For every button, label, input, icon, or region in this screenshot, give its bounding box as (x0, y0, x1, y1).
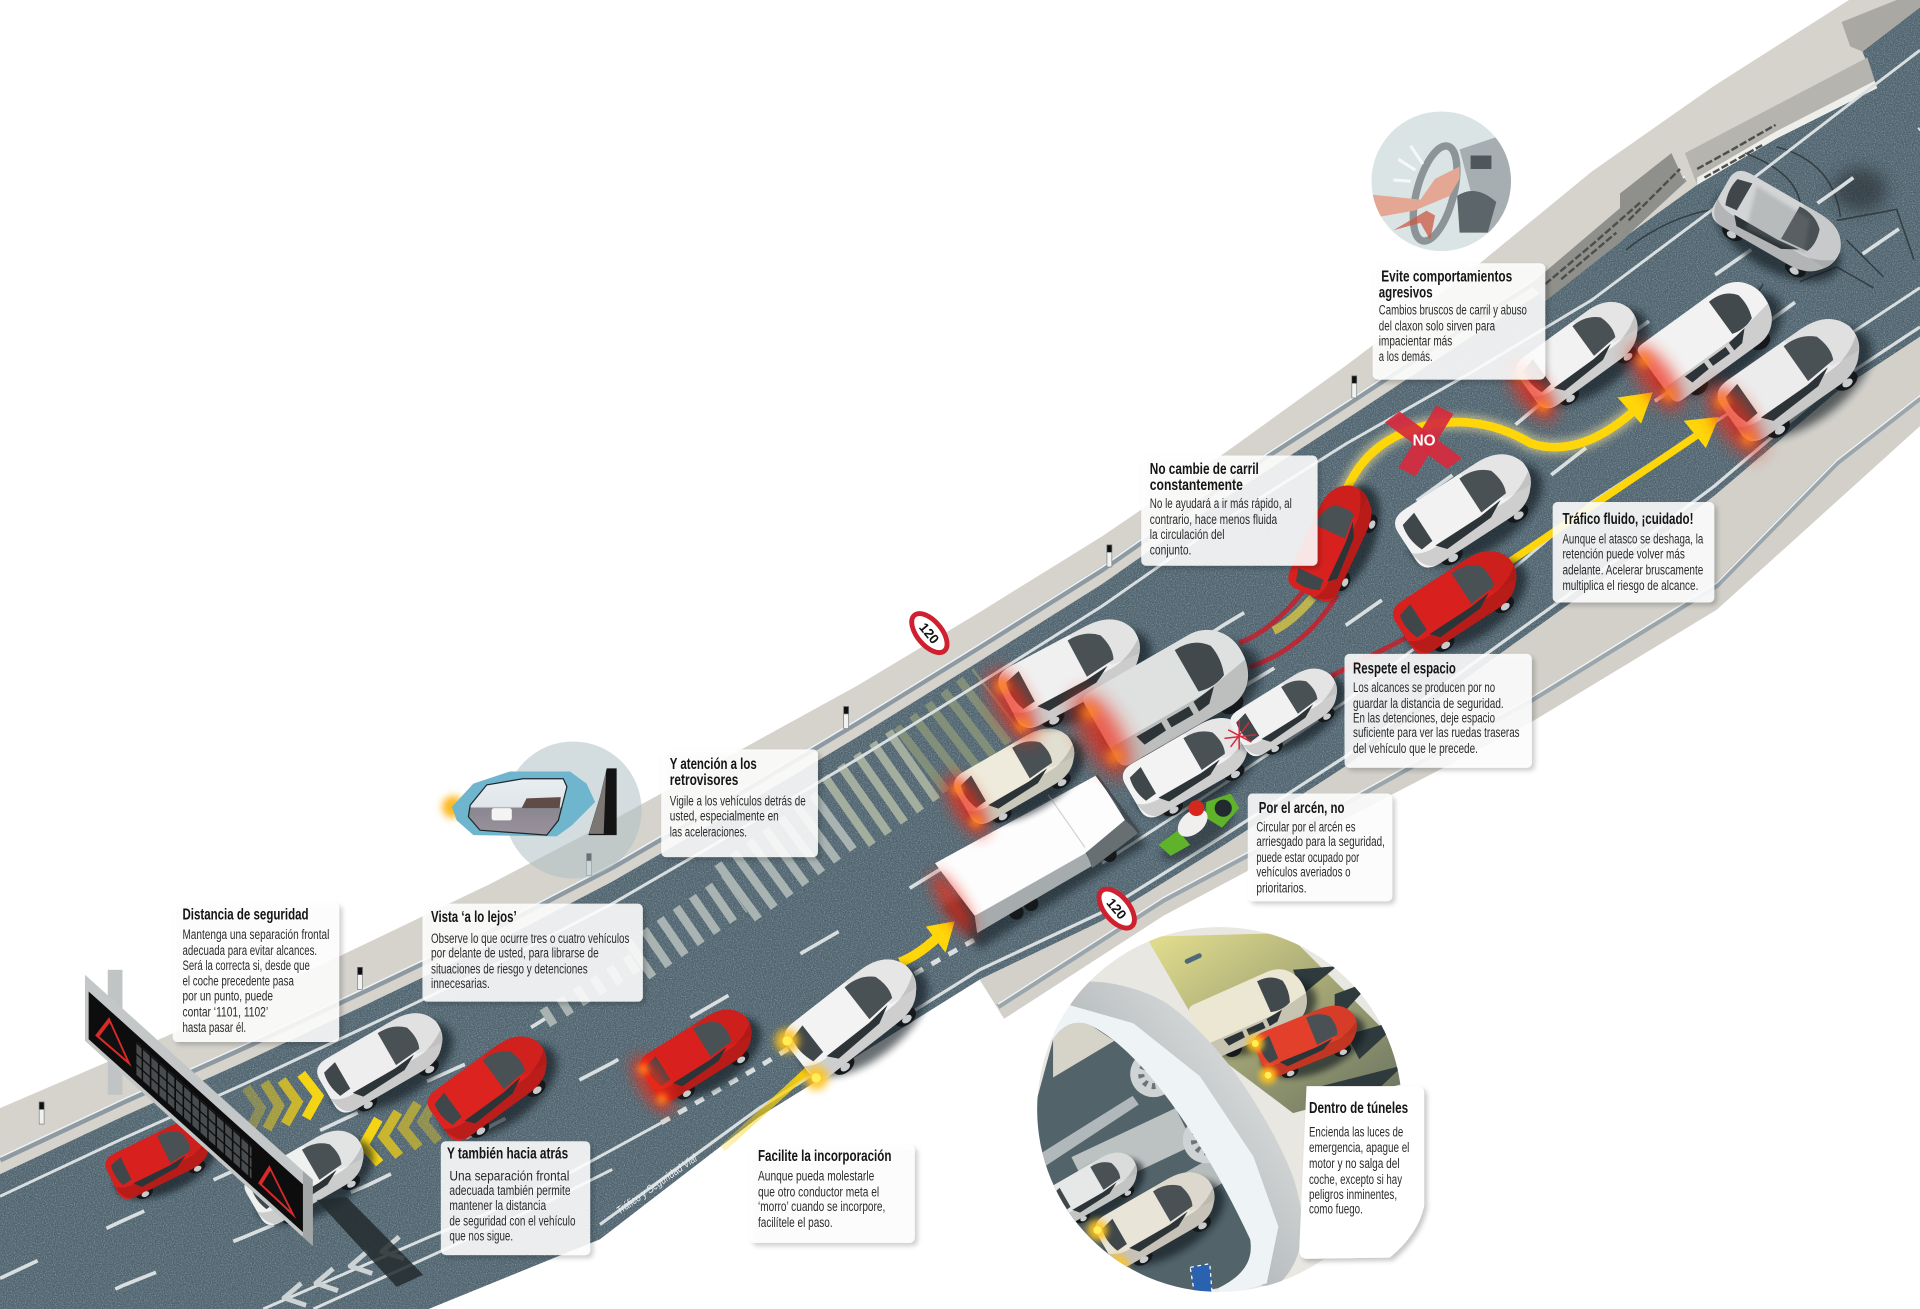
callout: Y también hacia atrás (441, 1141, 590, 1255)
heading: No cambie de carril (1150, 461, 1259, 478)
mirror backdrop circle (504, 741, 642, 879)
zebra hatching (545, 700, 998, 1019)
blue striped marker (1190, 1263, 1212, 1292)
heading: Respete el espacio (1353, 660, 1456, 677)
red car accelerating (1388, 535, 1543, 672)
white car behind gantry (240, 1116, 388, 1242)
callout: Evite comportamientos agresivos (1373, 263, 1545, 380)
trajectory arrows (722, 393, 1718, 1149)
arm and hand (1373, 167, 1460, 218)
heading: Tráfico fluido, ¡cuidado! (1562, 511, 1693, 528)
overhead gantry (85, 970, 313, 1246)
body text (1353, 680, 1520, 756)
body text: como fuego. (1309, 1201, 1363, 1216)
body text: facilítele el paso. (758, 1215, 833, 1230)
callout: Y atención a los retrovisores (661, 749, 818, 857)
speed sign lower: 120 (1103, 895, 1129, 922)
steering wheel (1410, 142, 1461, 245)
callout: Tráfico fluido, cuidado (1553, 502, 1714, 602)
yellow merge arrow (722, 1068, 811, 1149)
body text: Vigile a los vehículos detrás de (670, 794, 806, 809)
body text: del vehículo que le precede. (1353, 741, 1478, 756)
cream car braking (937, 710, 1099, 847)
truck (925, 775, 1146, 949)
white car braking top (1498, 282, 1665, 433)
body text: la circulación del (1150, 527, 1224, 542)
warning triangle right (260, 1159, 293, 1215)
body text (431, 931, 629, 991)
body text: multiplica el riesgo de alcance. (1562, 578, 1698, 593)
heading: Vista ‘a lo lejos’ (431, 909, 517, 926)
gantry panel (85, 975, 313, 1246)
body text: contrario, hace menos fluida (1150, 512, 1277, 527)
tunnel white ring (1041, 1005, 1278, 1298)
body text: No le ayudará a ir más rápido, al (1150, 496, 1292, 511)
dashboard (1460, 138, 1511, 233)
callout: Por el arcén, no (1248, 793, 1392, 901)
body text: motor y no salga del (1309, 1156, 1400, 1171)
white car in tunnel left (1054, 1152, 1148, 1226)
crashed car (1699, 166, 1858, 301)
yellow chevrons (246, 1074, 438, 1163)
body text: adelante. Acelerar bruscamente (1562, 562, 1704, 577)
body text: Observe lo que ocurre tres o cuatro vehículos (431, 931, 629, 946)
tunnel road (1146, 933, 1403, 1113)
body text: adecuada también permite (449, 1183, 571, 1198)
turn signal glow (442, 796, 464, 818)
body text: el coche precedente pasa (182, 974, 294, 989)
body text: Mantenga una separación frontal (182, 927, 329, 942)
body text (1379, 303, 1527, 364)
body text: coche, excepto si hay (1309, 1172, 1402, 1187)
body text: las aceleraciones. (670, 824, 747, 839)
body text (1256, 819, 1385, 896)
road signs and posts (39, 376, 1357, 1124)
body text: que otro conductor meta el (758, 1184, 879, 1199)
callout: No cambie de carril (1141, 456, 1318, 566)
body text (182, 927, 329, 1035)
body text: adecuada para evitar alcances. (182, 943, 317, 958)
body text: que nos sigue. (449, 1228, 513, 1243)
tunnel interior (1037, 1022, 1251, 1291)
callout: Facilite la incorporación (749, 1145, 915, 1243)
heading: Y también hacia atrás (447, 1145, 568, 1162)
white car collision front (1226, 655, 1359, 771)
NO cross (1385, 405, 1462, 476)
body text: guardar la distancia de seguridad. (1353, 696, 1504, 711)
body text: Aunque el atasco se deshaga, la (1562, 532, 1704, 547)
body text: a los demás. (1379, 349, 1433, 364)
white van braking top (1620, 261, 1800, 425)
motorcycle (1155, 793, 1240, 870)
red lane-changing car (1284, 471, 1396, 611)
truck cab (1085, 820, 1139, 868)
white car centre (1389, 437, 1560, 587)
red car behind gantry (102, 1110, 229, 1214)
body text: innecesarias. (431, 976, 490, 991)
body text: vehículos averiados o (1256, 865, 1351, 880)
white merging car (770, 940, 947, 1103)
cream van in tunnel (1189, 969, 1321, 1060)
warning triangle left (97, 1009, 129, 1065)
body text: del claxon solo sirven para (1379, 319, 1495, 334)
collision spark (1224, 720, 1256, 749)
body text: ‘morro’ cuando se incorpore, (758, 1199, 885, 1214)
outer tunnel shell (1070, 981, 1302, 1286)
red car in tunnel (1242, 1006, 1368, 1088)
heading: Por el arcén, no (1259, 800, 1345, 817)
heading: Distancia de seguridad (182, 907, 309, 924)
horn illustration (1371, 111, 1518, 251)
mirror glass (468, 779, 567, 835)
body text: puede estar ocupado por (1256, 850, 1359, 865)
scratched wall panels and crash marks (1531, 0, 1920, 321)
body text: Los alcances se producen por no (1353, 680, 1495, 695)
body text: Aunque pueda molestarle (758, 1168, 875, 1183)
body text: Será la correcta si, desde que (182, 958, 310, 973)
callout: Distancia de seguridad (173, 902, 339, 1042)
large van (1062, 606, 1280, 792)
callout: Respete el espacio (1344, 654, 1532, 768)
body text (1309, 1124, 1409, 1216)
speed sign lower (1092, 883, 1141, 934)
body text (1150, 496, 1292, 558)
body text: Una separación frontal (449, 1168, 569, 1183)
body text: prioritarios. (1256, 881, 1307, 896)
body text: peligros inminentes, (1309, 1187, 1397, 1202)
body text: suficiente para ver las ruedas traseras (1353, 725, 1520, 740)
truck brake lights (925, 867, 980, 940)
body text (1562, 532, 1704, 593)
red car with chevrons (422, 1021, 573, 1158)
callout: Vista a lo lejos (422, 904, 643, 1002)
speed sign upper: 120 (916, 620, 942, 647)
mirror mount (588, 768, 617, 835)
body text: usted, especialmente en (670, 808, 779, 823)
heading line 2: agresivos (1379, 285, 1433, 302)
body text: hasta pasar él. (182, 1020, 246, 1035)
body text: arriesgado para la seguridad, (1256, 834, 1385, 849)
body text: contar ‘1101, 1102’ (182, 1004, 268, 1019)
body text: Encienda las luces de (1309, 1124, 1404, 1139)
heading: Y atención a los (670, 756, 757, 773)
heading: Facilite la incorporación (758, 1148, 891, 1165)
lower concrete shoulder (980, 337, 1920, 1019)
body text: emergencia, apague el (1309, 1140, 1409, 1155)
straight yellow arrow (1504, 433, 1700, 566)
body text (758, 1168, 885, 1230)
body text: de seguridad con el vehículo (449, 1214, 576, 1229)
tunnel illustration (1037, 927, 1400, 1292)
white car in tunnel right (1082, 1172, 1228, 1270)
white car braking (978, 598, 1167, 755)
curved lane change arrow (1342, 410, 1635, 502)
heading line 2: retrovisores (670, 772, 738, 789)
white car collision rear (1118, 703, 1273, 835)
truck side (975, 851, 1092, 933)
body text: Circular por el arcén es (1256, 819, 1356, 834)
watermark: Tráfico y Seguridad Vial (614, 1152, 700, 1217)
white car braking right (1696, 296, 1891, 470)
guard rails (0, 176, 1920, 1160)
red braking car (624, 992, 775, 1123)
speed sign upper (905, 607, 954, 659)
silver car lane 1 (312, 998, 468, 1130)
body text: En las detenciones, deje espacio (1353, 710, 1495, 725)
body text: Cambios bruscos de carril y abuso (1379, 303, 1527, 318)
mirror illustration (442, 741, 642, 879)
heading line 2: constantemente (1150, 477, 1243, 494)
body text: impacientar más (1379, 333, 1452, 348)
gantry shadow (317, 1197, 423, 1287)
body text (449, 1168, 576, 1243)
body text: retención puede volver más (1562, 546, 1685, 561)
body text: mantener la distancia (449, 1198, 546, 1213)
red skid trails (1239, 585, 1408, 693)
body text: por delante de usted, para librarse de (431, 946, 599, 961)
gantry post (108, 970, 122, 1095)
NO cross: NO (1413, 433, 1436, 450)
body text: situaciones de riesgo y detenciones (431, 961, 588, 976)
body text (670, 794, 806, 839)
body text: por un punto, puede (182, 988, 273, 1003)
mirror housing (452, 771, 595, 836)
heading: Dentro de túneles (1309, 1100, 1408, 1117)
body text: conjunto. (1150, 543, 1191, 558)
truck roof (935, 775, 1125, 916)
callout: Dentro de túneles (1299, 1086, 1424, 1259)
roadside posts (39, 376, 1357, 1124)
heading: Evite comportamientos (1381, 269, 1512, 286)
